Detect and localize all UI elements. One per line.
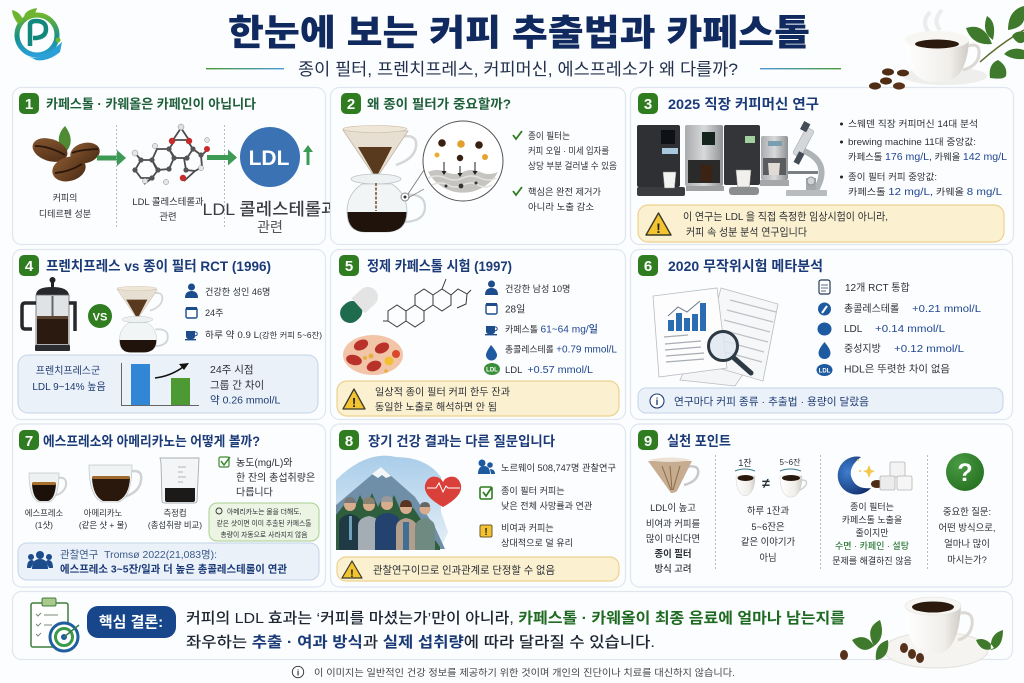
panel 3 heading: 2025 직장 커피머신 연구 — [668, 96, 819, 112]
point: key question: 얼마나 많이 — [944, 538, 990, 549]
badge 4 — [19, 255, 39, 276]
study facts: 24주 — [205, 308, 223, 318]
study facts — [484, 280, 617, 376]
meta-analysis results — [816, 280, 981, 376]
arrow: molecule to LDL — [207, 150, 237, 166]
meta-analysis results: 12개 RCT 통합 — [845, 282, 910, 294]
badge 3 — [638, 93, 658, 114]
panel 1 heading: 카페스톨 · 카웨올은 카페인이 아닙니다 — [46, 96, 256, 112]
badge 6: 6 — [644, 258, 652, 275]
icon: coffee machines — [637, 125, 789, 196]
study facts: 비여과 커피는 — [501, 522, 554, 533]
text: filter facts: 아니라 노출 감소 — [528, 201, 594, 212]
study facts: ! — [484, 527, 488, 538]
panel 6 heading: 2020 무작위시험 메타분석 — [668, 258, 823, 274]
callout: heterogeneity — [638, 388, 1003, 413]
callout: heterogeneity: 연구마다 커피 종류 · 추출법 · 용량이 달랐음 — [674, 395, 869, 408]
point: sleep, caffeine, sugar: 문제를 해결하진 않음 — [832, 556, 912, 566]
badge 8 — [339, 430, 359, 450]
icon: report with magnifier — [653, 288, 778, 386]
label: LDL related small: LDL 콜레스테롤과 — [132, 196, 204, 207]
badge 2: 2 — [347, 96, 355, 113]
study facts: 건강한 남성 10명 — [505, 284, 570, 294]
callout: exposure caution: 동일한 노출로 해석하면 안 됨 — [375, 400, 497, 414]
point: sleep, caffeine, sugar: 수면 · 카페인 · 설탕 — [835, 540, 909, 551]
callout: total amount — [209, 503, 319, 541]
callout: Tromsø study: 에스프레소 3~5잔/일과 더 높은 총콜레스테롤이 연관 — [60, 562, 287, 576]
label: diterpene — [39, 193, 91, 219]
text: study findings: 카페스톨 176 mg/L, 카웨올 142 mg/L — [848, 151, 1007, 163]
label: espresso: (1샷) — [35, 520, 53, 530]
panel 4 heading: 프렌치프레스 vs 종이 필터 RCT (1996) — [46, 258, 271, 274]
icon: espresso cup — [29, 473, 66, 502]
point: one cup vs five: 5~6잔 — [780, 457, 801, 467]
label: LDL related large — [202, 200, 338, 235]
icon: blood cells — [343, 335, 403, 375]
note: concentration vs intake: 다릅니다 — [236, 486, 273, 498]
label: diterpene: 커피의 — [53, 193, 77, 203]
label: LDL related small: 관련 — [159, 211, 177, 222]
icon: pour-over dripper — [343, 126, 425, 232]
label: LDL related small — [132, 196, 204, 222]
icon: LDL circle: LDL — [249, 147, 290, 170]
meta-analysis results: LDL — [819, 368, 831, 374]
conclusion text: 좌우하는 추출 · 여과 방식 과 실제 섭취량 에 따라 달라질 수 있습니다. — [186, 634, 655, 651]
badge 7 — [19, 430, 39, 450]
icon: VS badge: VS — [93, 312, 107, 324]
badge 8: 8 — [345, 433, 353, 450]
callout: Tromsø study: 관찰연구 Tromsø 2022(21,083명): — [60, 549, 217, 561]
study facts — [185, 284, 322, 340]
panel 1: cafestol is not caffeine — [12, 88, 338, 244]
study facts: 총콜레스테롤 +0.79 mmol/L — [505, 344, 617, 356]
label: diterpene: 디테르펜 성분 — [39, 209, 91, 219]
panel 5: purified cafestol trial — [330, 250, 626, 420]
study facts: 28일 — [505, 304, 525, 316]
icon: diterpene molecule — [132, 124, 210, 185]
text: study findings: 스웨덴 직장 커피머신 14대 분석 — [848, 118, 978, 129]
label: measuring cup: 측정컵 — [163, 508, 187, 518]
text: filter facts — [513, 130, 617, 212]
label: key conclusion — [87, 606, 176, 638]
callout: Tromsø study — [18, 543, 319, 580]
point: paper filter: LDL이 높고 — [650, 502, 696, 513]
result box: 프렌치프레스군 — [36, 365, 100, 377]
panel 6: 2020 meta-analysis — [630, 250, 1012, 420]
point: key question: 어떤 방식으로, — [939, 522, 995, 533]
badge 1 — [19, 93, 39, 114]
badge 5 — [339, 255, 359, 276]
callout: heterogeneity: i — [656, 397, 659, 408]
point: one cup vs five: ≠ — [762, 475, 770, 491]
study facts: 카페스톨 61~64 mg/일 — [505, 322, 598, 336]
text: study findings: 카페스톨 12 mg/L, 카웨올 8 mg/L — [848, 186, 1002, 198]
icon: coffee beans — [29, 126, 102, 185]
result box: 약 0.26 mmol/L — [210, 394, 281, 406]
label: espresso — [25, 508, 64, 530]
study facts: 종이 필터 커피는 — [501, 485, 565, 496]
panel 5 heading: 정제 카페스톨 시험 (1997) — [367, 258, 512, 274]
label: americano: (같은 샷 + 물) — [79, 520, 127, 530]
point: key question — [939, 453, 995, 565]
point: sleep, caffeine, sugar: 줄이지만 — [855, 528, 889, 538]
illustration: coffee cup with leaves — [869, 6, 1024, 90]
meta-analysis results: HDL은 뚜렷한 차이 없음 — [844, 362, 950, 376]
point: paper filter: 비여과 커피를 — [646, 518, 701, 529]
text: study findings: 종이 필터 커피 중앙값: — [848, 171, 937, 182]
note: concentration vs intake — [219, 457, 315, 498]
study facts: LDL — [486, 368, 498, 374]
panel 8 heading: 장기 건강 결과는 다른 질문입니다 — [368, 434, 556, 449]
result box: 그룹 간 차이 — [210, 380, 264, 392]
conclusion text: 커피의 LDL 효과는 ‘커피를 마셨는가’만이 아니라, 카페스톨 · 카웨올이 최종 음료에 얼마나 남는지를 — [186, 610, 845, 627]
callout: not a clinical trial: 이 연구는 LDL 을 직접 측정한 임상시험이 아니라, — [683, 210, 888, 223]
title: 한눈에 보는 커피 추출법과 카페스톨 — [228, 12, 810, 53]
text: study findings — [840, 118, 1007, 198]
point: one cup vs five: 같은 이야기가 — [741, 536, 796, 547]
point: sleep, caffeine, sugar — [832, 457, 912, 566]
meta-analysis results: +0.12 mmol/L — [894, 344, 964, 355]
icon: VS badge — [88, 304, 112, 328]
icon: capsule — [336, 283, 382, 327]
panel 2 heading: 왜 종이 필터가 중요할까? — [367, 96, 511, 112]
illustration: cup on saucer — [840, 597, 1003, 668]
point: paper filter: 종이 필터 — [654, 548, 692, 559]
callout: observational caution: 관찰연구이므로 인과관계로 단정할 수 없음 — [373, 564, 555, 576]
panel 4: French press RCT — [12, 250, 326, 420]
badge 9 — [638, 430, 658, 450]
point: key question: ? — [957, 459, 973, 487]
result box: 24주 시점 — [210, 364, 254, 376]
point: key question: 중요한 질문: — [943, 506, 991, 517]
panel 3: 2025 workplace machines — [630, 88, 1014, 244]
callout: exposure caution: 일상적 종이 필터 커피 한두 잔과 — [375, 386, 510, 398]
divider — [716, 455, 928, 569]
badge 6 — [638, 255, 658, 276]
text: filter facts: 상당 부분 걸러낼 수 있음 — [528, 160, 617, 171]
icon: dripper small — [117, 286, 168, 352]
icon: steroid molecule — [383, 279, 471, 327]
point: one cup vs five: 1잔 — [738, 458, 752, 468]
icon: LDL circle — [240, 127, 300, 187]
point: paper filter: 방식 고려 — [654, 563, 692, 574]
result box: LDL 9~14% 높음 — [32, 381, 106, 393]
callout: not a clinical trial: 커피 속 성분 분석 연구입니다 — [686, 226, 807, 238]
arrow: beans to molecule — [97, 150, 126, 166]
meta-analysis results: LDL — [844, 324, 863, 335]
label: LDL related large: 관련 — [257, 219, 283, 235]
point: key question: 마시는가? — [947, 554, 987, 565]
text: study findings: brewing machine 11대 중앙값: — [848, 136, 976, 147]
icon: microscope — [786, 121, 827, 196]
point: sleep, caffeine, sugar: 종이 필터는 — [850, 501, 894, 512]
icon: French press — [22, 277, 75, 351]
study facts: 낮은 전체 사망률과 연관 — [501, 501, 593, 511]
text: filter facts: 커피 오일 · 미세 입자를 — [528, 145, 609, 156]
label: espresso: 에스프레소 — [25, 508, 64, 518]
bar chart — [122, 363, 199, 406]
study facts — [478, 460, 616, 548]
point: sleep, caffeine, sugar: 카페스톨 노출을 — [842, 515, 902, 525]
point: paper filter — [646, 458, 701, 574]
badge 2 — [341, 93, 361, 114]
point: one cup vs five: 아님 — [759, 552, 777, 563]
icon: americano mug — [89, 465, 141, 502]
callout: exposure caution: ! — [352, 395, 356, 410]
badge 7: 7 — [25, 433, 33, 450]
callout: observational caution: ! — [350, 568, 354, 580]
callout: not a clinical trial — [638, 205, 1004, 242]
panel 9 heading: 실천 포인트 — [667, 433, 731, 449]
meta-analysis results: +0.14 mmol/L — [875, 324, 945, 335]
study facts: LDL +0.57 mmol/L — [505, 365, 593, 376]
icon: filter magnified — [408, 121, 503, 201]
illustration: people, mountains and heart — [336, 456, 461, 550]
label: key conclusion: 핵심 결론: — [99, 614, 163, 631]
panel 2: paper filter — [330, 88, 626, 244]
callout: total amount: 아메리카노는 물을 더해도, — [227, 507, 302, 516]
footer disclaimer: i — [297, 668, 299, 678]
badge 5: 5 — [345, 258, 353, 275]
study facts: 건강한 성인 46명 — [205, 287, 270, 297]
study facts: 하루 약 0.9 L (강한 커피 5~6잔) — [205, 329, 322, 340]
meta-analysis results: 총콜레스테롤 — [844, 303, 899, 315]
study facts: 상대적으로 덜 유리 — [501, 537, 573, 548]
point: paper filter: 많이 마신다면 — [646, 533, 700, 544]
callout: total amount: 같은 샷이면 이미 추출된 카페스톨 — [216, 518, 312, 528]
arrow: LDL up — [303, 145, 313, 165]
label: measuring cup — [148, 508, 202, 530]
meta-analysis results: +0.21 mmol/L — [912, 304, 981, 315]
badge 9: 9 — [644, 433, 652, 450]
panel 9: practical points — [630, 424, 1012, 587]
label: LDL related large: LDL 콜레스테롤과 — [202, 200, 338, 219]
point: one cup vs five: 5~6잔은 — [751, 521, 785, 532]
note: concentration vs intake: 한 잔의 총섭취량은 — [236, 472, 315, 484]
note: concentration vs intake: 농도(mg/L)와 — [236, 457, 292, 469]
panel: key conclusion — [12, 592, 1012, 668]
icon: clipboard and target — [31, 598, 79, 651]
conclusion text — [186, 610, 845, 651]
label: americano — [79, 508, 127, 530]
badge 1: 1 — [25, 96, 33, 113]
callout: exposure caution — [337, 381, 619, 416]
text: filter facts: 종이 필터는 — [528, 130, 570, 141]
panel 7 heading: 에스프레소와 아메리카노는 어떻게 볼까? — [43, 434, 260, 449]
label: americano: 아메리카노 — [84, 508, 123, 518]
footer disclaimer: 이 이미지는 일반적인 건강 정보를 제공하기 위한 것이며 개인의 진단이나 치료를 대신하지 않습니다. — [314, 667, 735, 679]
study facts: 노르웨이 508,747명 관찰연구 — [501, 462, 616, 473]
panel 7: espresso and americano — [12, 424, 326, 587]
badge 4: 4 — [25, 258, 34, 275]
subtitle: 종이 필터, 프렌치프레스, 커피머신, 에스프레소가 왜 다를까? — [298, 60, 738, 79]
label: measuring cup: (총섭취량 비교) — [148, 520, 202, 530]
point: one cup vs five: 하루 1잔과 — [747, 505, 790, 516]
logo — [12, 8, 62, 60]
result box — [18, 355, 318, 413]
callout: total amount: 총량이 자동으로 사라지지 않음 — [221, 530, 307, 539]
text: filter facts: 핵심은 완전 제거가 — [528, 186, 602, 197]
badge 3: 3 — [644, 96, 652, 113]
callout: observational caution — [337, 557, 619, 581]
callout: not a clinical trial: ! — [656, 220, 661, 236]
meta-analysis results: 중성지방 — [844, 343, 881, 355]
point: one cup vs five — [735, 457, 806, 563]
icon: measuring cup — [160, 458, 199, 503]
panel 8: long-term outcomes — [330, 424, 626, 587]
divider — [116, 125, 224, 227]
